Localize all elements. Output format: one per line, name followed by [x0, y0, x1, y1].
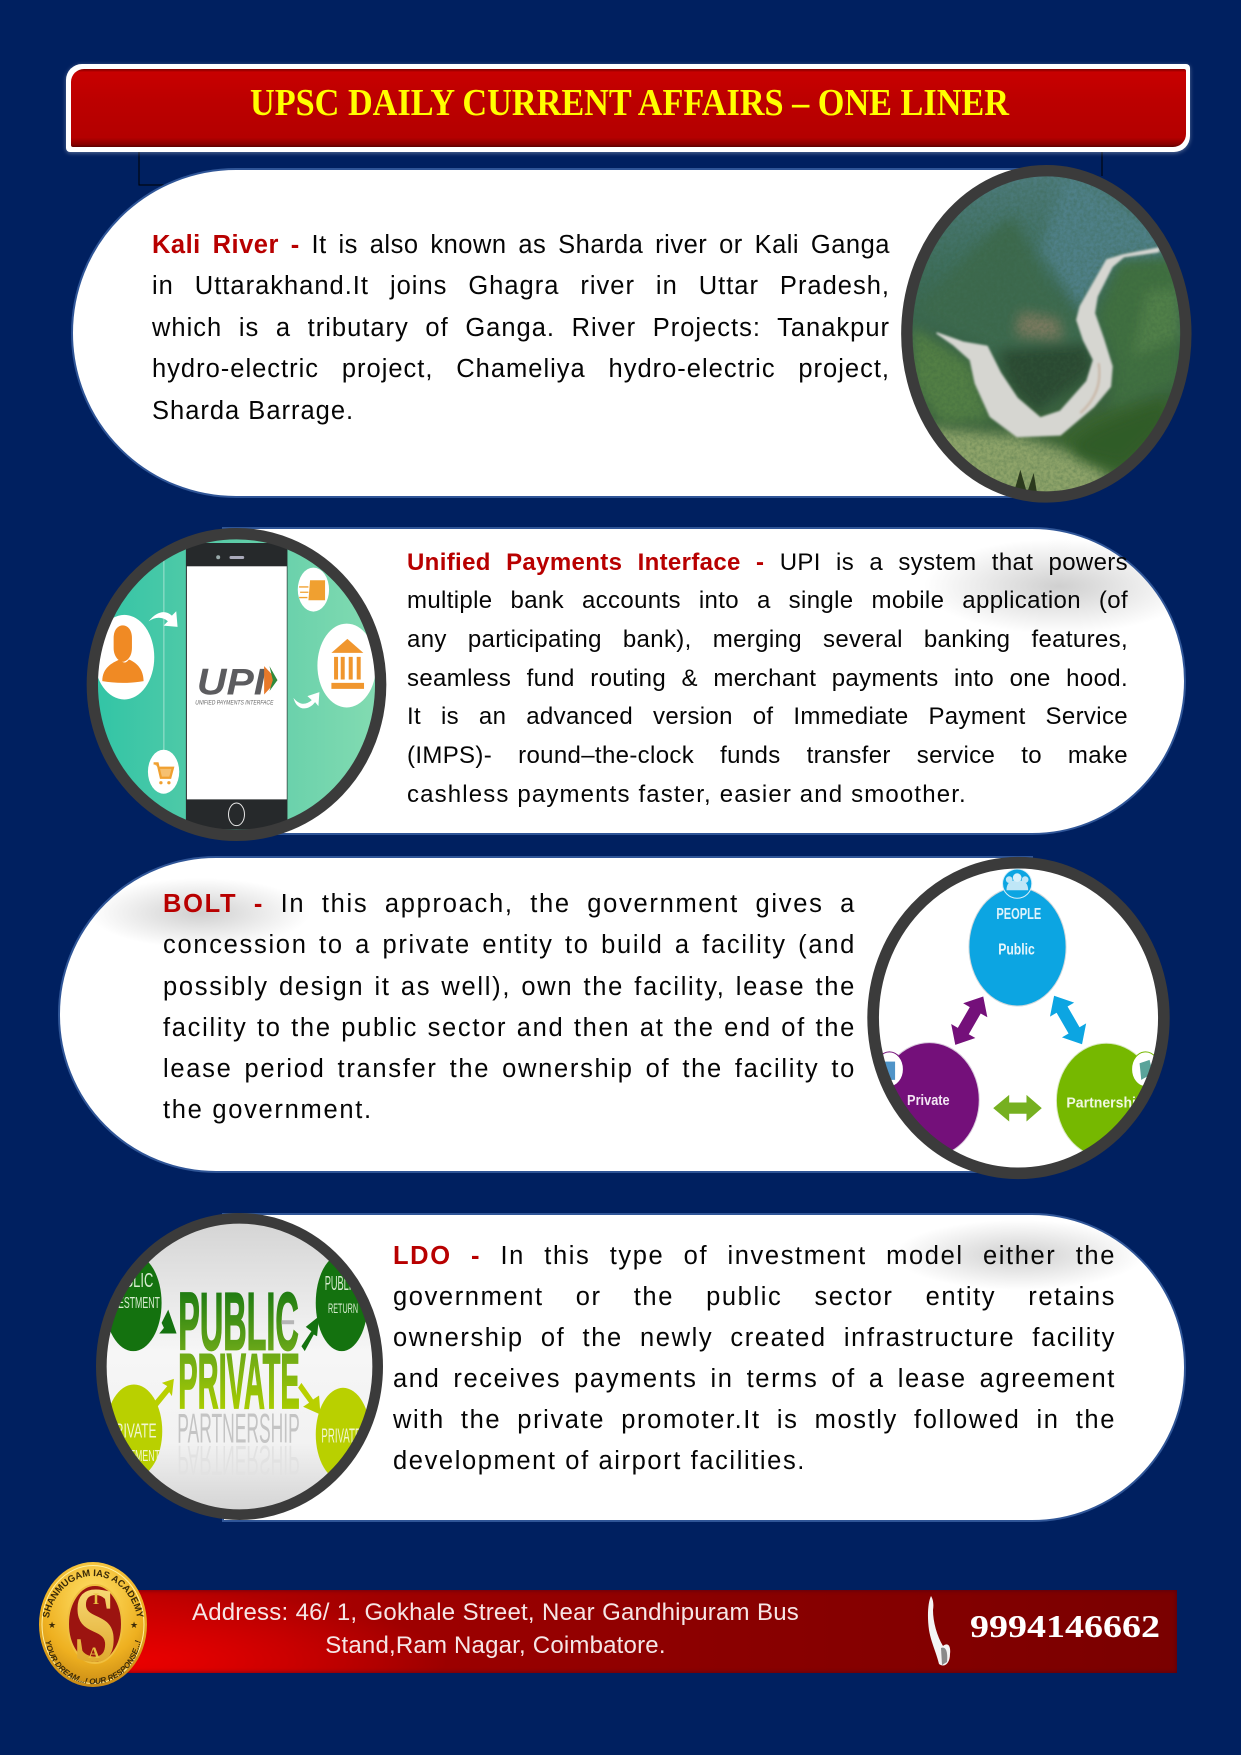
people circle: Public: [998, 941, 1035, 958]
text block: Kali River: in Uttarakhand.It joins Ghagra river in Uttar Pradesh,: [152, 272, 890, 300]
text block: Kali River: hydro-electric project, Chameliya hydro-electric project,: [152, 355, 890, 383]
logo: Shanmugam IAS Academy badge: S: [73, 1566, 117, 1685]
text block: UPI: multiple bank accounts into a single mobile application (of: [407, 587, 1128, 614]
text block: LDO: with the private promoter.It is mostly followed in the: [393, 1406, 1116, 1434]
footer: [39, 1562, 1177, 1687]
arrows: [159, 1310, 177, 1334]
title text: UPSC DAILY CURRENT AFFAIRS – ONE LINER: [250, 82, 1009, 124]
text block: UPI: (IMPS)- round–the-clock funds transfer service to make: [407, 742, 1128, 769]
header connector lines: [138, 152, 1102, 186]
UPI logo: UNIFIED PAYMENTS INTERFACE: [195, 699, 274, 706]
text block: BOLT: lease period transfer the ownership of the facility to: [163, 1055, 856, 1083]
arrows: [951, 996, 988, 1045]
panel shape: [71, 168, 1021, 498]
investment and return circles: RETURN: [328, 1300, 358, 1316]
text block: UPI: seamless fund routing & merchant payments into one hood.: [407, 665, 1128, 692]
text block: UPI: [407, 548, 1128, 808]
UPI logo: UPI: [197, 660, 266, 702]
text block: BOLT: possibly design it as well), own the facility, lease the: [163, 973, 856, 1001]
logo: Shanmugam IAS Academy badge: ★: [130, 1620, 138, 1630]
people circle: [969, 869, 1066, 1006]
image: UPI phone illustration: [86, 528, 386, 841]
UPI logo: [196, 666, 278, 704]
image: public private partnership wordmark: PARTNERSHIP: [177, 1406, 300, 1452]
logo: Shanmugam IAS Academy badge: A: [88, 1645, 100, 1662]
cart icon: [148, 750, 179, 794]
image: public private partnership wordmark: PRIVATE: [178, 1337, 300, 1425]
icon: telephone handset: [928, 1596, 950, 1666]
text block: BOLT: the government.: [163, 1096, 373, 1124]
logo: Shanmugam IAS Academy badge: SHANMUGAM IAS ACADEMY: [42, 1570, 144, 1618]
investment and return circles: INVESTMENT: [103, 1295, 160, 1312]
private circle: [883, 1042, 980, 1150]
text block: BOLT: concession to a private entity to build a facility (and: [163, 931, 856, 959]
text block: Kali River: Sharda Barrage.: [152, 397, 354, 425]
address text: Stand,Ram Nagar, Coimbatore.: [325, 1632, 666, 1658]
text block: Kali River: [152, 231, 890, 425]
partnership circle: Partnership: [1066, 1095, 1145, 1111]
text block: LDO: LDO - In this type of investment model either the: [393, 1242, 1116, 1270]
text block: BOLT: facility to the public sector and then at the end of the: [163, 1014, 856, 1042]
image: public private partnership wordmark: PUBLIC: [178, 1277, 299, 1368]
text block: LDO: and receives payments in terms of a lease agreement: [393, 1365, 1116, 1393]
investment and return circles: PRIVATE: [321, 1426, 361, 1448]
text block: LDO: [393, 1242, 1116, 1475]
partnership circle: [1056, 1043, 1160, 1158]
footer bar: [127, 1590, 1177, 1673]
phone: [186, 543, 287, 829]
text block: BOLT: BOLT - In this approach, the government gives a: [163, 890, 856, 918]
river: [937, 248, 1159, 436]
bank icon: [317, 624, 376, 707]
logo: Shanmugam IAS Academy badge: YOUR DREAM...! OUR RESPONSE...!: [46, 1640, 140, 1684]
investment and return circles: [103, 1255, 370, 1481]
panel shape with soft shadow: [222, 1213, 1186, 1522]
image: public private partnership wordmark: PARTNERSHIP: [177, 1437, 300, 1483]
image: river valley photo: [901, 165, 1192, 503]
text block: BOLT: [163, 890, 856, 1124]
panel: BOLT: [58, 856, 1170, 1180]
panel: LDO: [96, 1213, 1186, 1522]
investment and return circles: PUBLIC: [107, 1270, 153, 1292]
logo: Shanmugam IAS Academy badge: I: [93, 1591, 99, 1608]
white arrows: [149, 611, 178, 627]
image: public private partnership cycle: [867, 856, 1170, 1180]
card icon: [298, 568, 329, 612]
text block: Kali River: which is a tributary of Ganga. River Projects: Tanakpur: [152, 314, 890, 342]
address text: [192, 1598, 799, 1658]
image: public private partnership wordmark: [96, 1213, 383, 1520]
investment and return circles: PRIVATE: [107, 1421, 157, 1443]
text block: UPI: It is an advanced version of Immediate Payment Service: [407, 703, 1128, 730]
text block: Kali River: Kali River - It is also known as Sharda river or Kali Ganga: [152, 231, 890, 259]
banner red fill: [71, 69, 1186, 147]
address text: Address: 46/ 1, Gokhale Street, Near Gandhipuram Bus: [192, 1598, 799, 1626]
panel: Kali River: [71, 165, 1192, 503]
panel shape with soft shadow: [222, 527, 1186, 835]
person icon: [94, 615, 154, 699]
investment and return circles: PUBLIC: [325, 1273, 358, 1295]
people circle: PEOPLE: [996, 906, 1041, 923]
text block: LDO: government or the public sector entity retains: [393, 1283, 1116, 1311]
title banner: [66, 64, 1190, 152]
phone number: 9994146662: [970, 1608, 1160, 1644]
panel shape with soft shadow: [58, 856, 1033, 1173]
logo: Shanmugam IAS Academy badge: [39, 1562, 147, 1687]
text block: LDO: ownership of the newly created infrastructure facility: [393, 1324, 1116, 1352]
text block: UPI: cashless payments faster, easier and smoother.: [407, 781, 967, 808]
text block: UPI: Unified Payments Interface - UPI is a system that powers: [407, 548, 1128, 576]
investment and return circles: INVESTMENT: [103, 1448, 160, 1465]
text block: LDO: development of airport facilities.: [393, 1447, 806, 1475]
text block: UPI: any participating bank), merging several banking features,: [407, 626, 1128, 653]
logo: Shanmugam IAS Academy badge: ★: [48, 1620, 56, 1630]
private circle: Private: [907, 1093, 950, 1109]
panel: Unified Payments Interface: [86, 527, 1186, 841]
